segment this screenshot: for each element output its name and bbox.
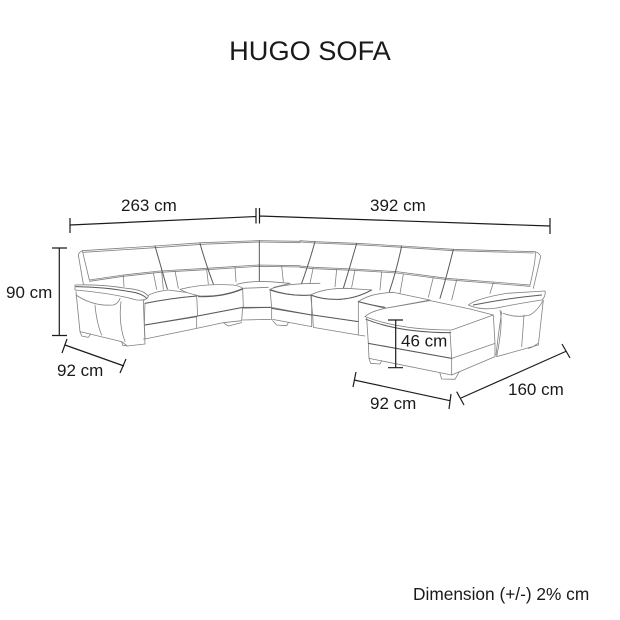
label: 392 cm: 392 cm xyxy=(370,196,426,215)
dark back seams xyxy=(302,242,453,298)
dark piping xyxy=(311,290,542,358)
sofa right section with chaise xyxy=(300,241,545,379)
dimension line: 92 cm left depth xyxy=(62,339,126,373)
label: 46 cm: 46 cm xyxy=(401,332,447,350)
label: 92 cm left: 92 cm xyxy=(57,361,103,380)
dimension line: 263 cm width xyxy=(70,208,256,233)
sofa left section xyxy=(75,241,320,346)
dimension lines xyxy=(52,208,570,409)
dimension line: 160 cm chaise depth xyxy=(457,344,570,405)
sofa line drawing xyxy=(75,241,545,379)
label: 160 cm: 160 cm xyxy=(508,380,564,399)
dimension line: 92 cm chaise width xyxy=(353,372,451,409)
dimension line: 392 cm width xyxy=(260,208,550,234)
label: 90 cm: 90 cm xyxy=(6,283,52,302)
footnote: Dimension (+/-) 2% cm xyxy=(413,584,589,604)
label: 263 cm: 263 cm xyxy=(121,196,177,215)
dimension line: 90 cm height xyxy=(52,248,67,336)
dimension line: 46 cm seat height xyxy=(388,320,403,368)
label: 92 cm right: 92 cm xyxy=(370,394,416,413)
title: HUGO SOFA xyxy=(229,35,392,66)
dark seams xyxy=(76,241,312,325)
